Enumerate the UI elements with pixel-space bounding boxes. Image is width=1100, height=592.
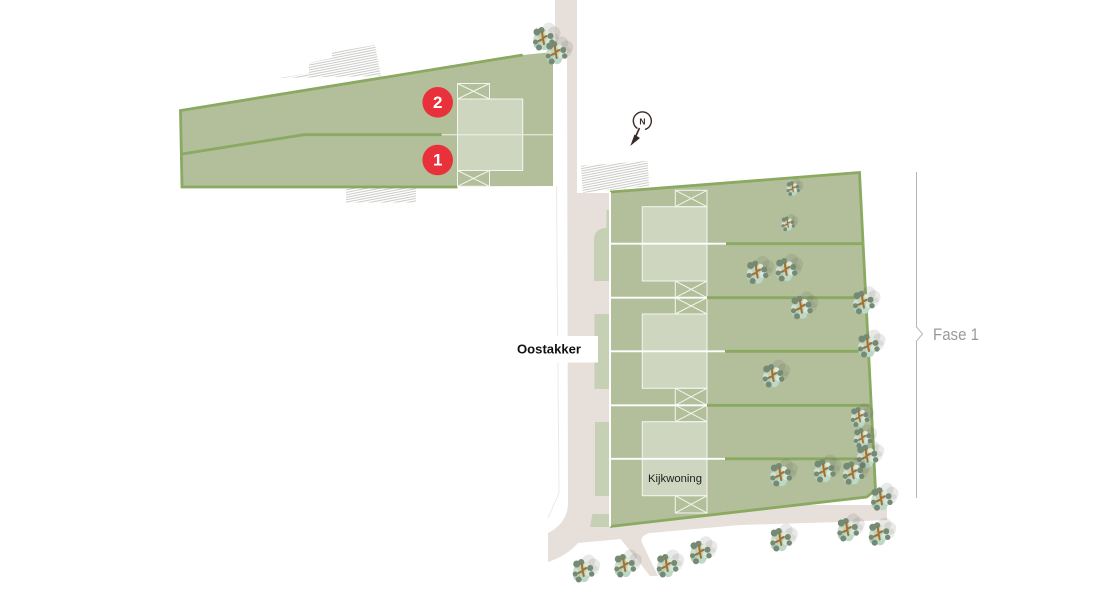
label: Fase 1: Fase 1 [933,326,979,344]
road [548,0,887,576]
panel: top plot [180,52,553,187]
icon: north arrow [630,112,651,146]
trees [533,22,898,582]
panel: main plot fase 1 [610,172,876,526]
houses [642,207,707,496]
green lot dividers [707,244,873,459]
house [458,99,523,170]
label: Oostakker: Oostakker [517,342,581,356]
parking strip 3 [595,422,610,496]
lot divider [182,135,442,154]
label: Oostakker [505,336,598,362]
hatched neighbour building east [581,161,649,193]
hatched neighbour building north [280,45,381,78]
parking strip 1 [594,210,610,281]
hatched neighbour building south [346,188,416,202]
marker 1: 1 [433,151,442,170]
icon: north arrow: N [639,116,646,126]
parking strip 2 [594,314,610,389]
parking corner [590,514,610,527]
plot boundary [610,172,876,526]
carport south [458,170,490,186]
bracket: fase 1 [916,172,922,498]
plot boundary [180,55,523,187]
label: Kijkwoning: Kijkwoning [648,473,702,485]
thin road edge line [548,186,559,518]
marker 2: 2 [433,93,442,112]
carport north [458,84,490,99]
marker 2 [422,87,453,118]
carports [675,190,707,513]
white lot dividers [610,192,726,526]
marker 1 [422,145,453,175]
